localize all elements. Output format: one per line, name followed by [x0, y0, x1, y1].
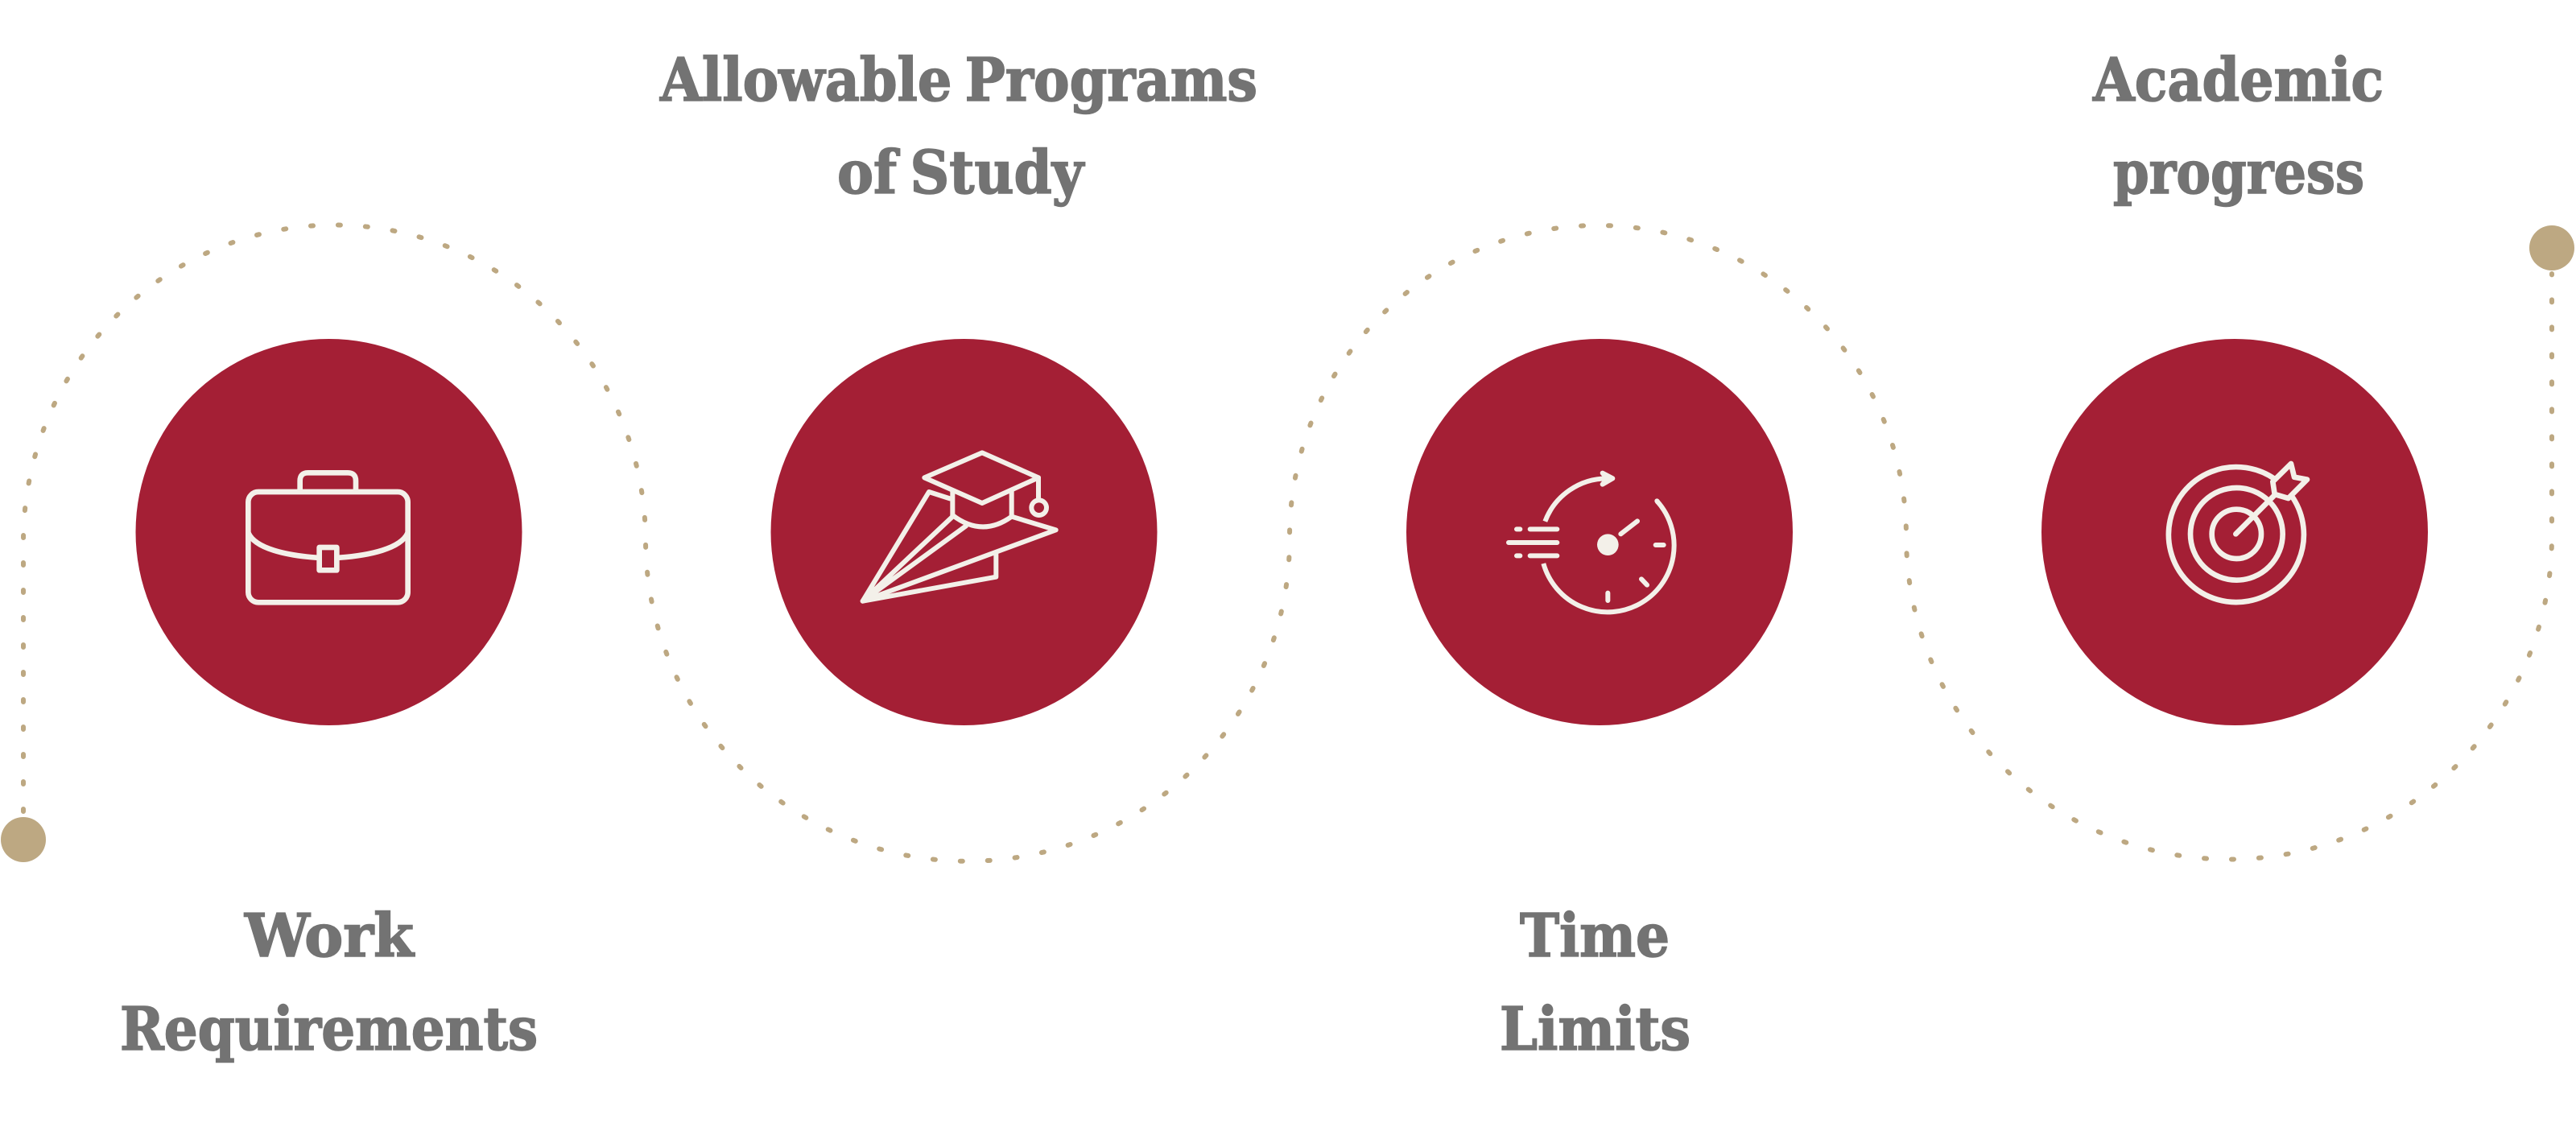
label: Time Limits: [1500, 902, 1690, 1064]
label: Time Limits: Limits: [1500, 995, 1690, 1064]
label: Allowable Programs of Study: of Study: [837, 138, 1085, 208]
label: Academic progress: Academic: [2092, 46, 2384, 115]
end dot: [2529, 225, 2574, 270]
label: Work Requirements: Requirements: [120, 995, 538, 1064]
label: Time Limits: Time: [1520, 902, 1670, 971]
label: Work Requirements: Work: [244, 902, 415, 971]
label: Work Requirements: [120, 902, 538, 1064]
dotted winding path: [23, 225, 2552, 861]
icon: briefcase: [248, 473, 408, 602]
start dot: [1, 817, 46, 862]
circle badge 1: [135, 339, 522, 725]
step 3: time limits: [1406, 339, 1793, 1064]
circle badge 3: [1406, 339, 1793, 725]
circle badge 2: [771, 339, 1158, 725]
circle badge 4: [2041, 339, 2428, 725]
step 2: allowable programs of study: [659, 46, 1257, 725]
step 1: work requirements: [120, 339, 538, 1064]
label: Allowable Programs of Study: Allowable Programs: [659, 46, 1257, 115]
step 4: academic progress: [2041, 46, 2428, 725]
icon: target with arrow: [2169, 464, 2307, 602]
icon: graduation cap paper plane: [863, 452, 1056, 601]
label: Allowable Programs of Study: [659, 46, 1257, 208]
label: Academic progress: [2092, 46, 2384, 208]
icon: stopwatch with speed lines: [1509, 473, 1674, 612]
label: Academic progress: progress: [2113, 138, 2364, 208]
